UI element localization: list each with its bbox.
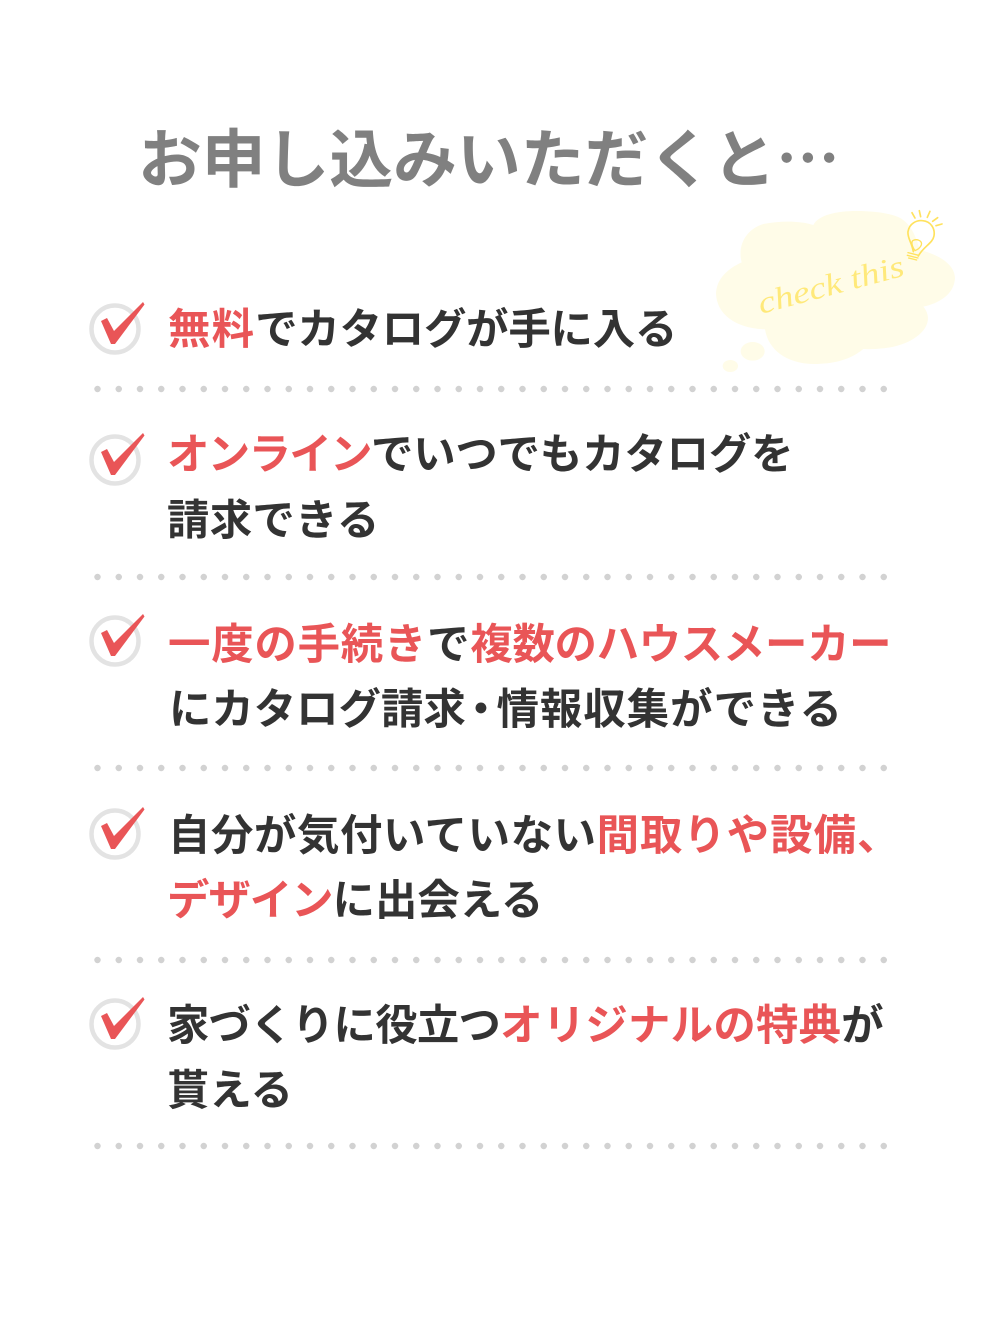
icon: check item 3 [92, 614, 144, 664]
icon: check item 1 [92, 302, 144, 352]
item 5 text line 2: 貰える [167, 1057, 293, 1118]
item 1 text: 無料でカタログが手に入る [168, 296, 677, 357]
icon: check item 2 [92, 433, 144, 484]
item 4 text line 2: デザインに出会える [167, 867, 543, 928]
icon: check item 4 [92, 807, 144, 858]
item 3 text line 1: 一度の手続きで複数のハウスメーカー [168, 611, 891, 672]
title: お申し込みいただくと… [138, 109, 840, 201]
item 5 text line 1: 家づくりに役立つオリジナルの特典が [167, 992, 884, 1053]
item 2 text line 1: オンラインでいつでもカタログを [167, 421, 793, 482]
thought cloud with check this label [716, 211, 955, 372]
icon: light bulb [907, 211, 942, 260]
item 3 text line 2: にカタログ請求・情報収集ができる [169, 676, 843, 737]
item 4 text line 1: 自分が気付いていない間取りや設備、 [168, 802, 900, 863]
check this script text: check this [754, 248, 908, 321]
icon: check item 5 [92, 997, 144, 1048]
item 2 text line 2: 請求できる [167, 487, 380, 548]
